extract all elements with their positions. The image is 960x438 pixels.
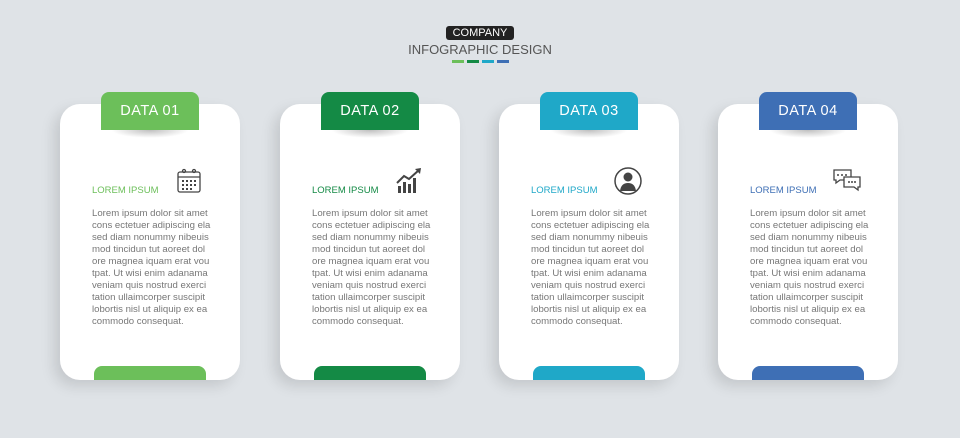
bottom bar (94, 366, 206, 380)
body text: cons ectetuer adipiscing ela (312, 220, 430, 231)
heading: LOREM IPSUM (750, 185, 817, 196)
body text (312, 208, 430, 327)
icon: person (614, 167, 642, 195)
heading: LOREM IPSUM (531, 185, 598, 196)
body text: ore magnea iquam erat vou (92, 256, 209, 267)
tab: DATA 01 (101, 92, 199, 130)
body text: mod tincidun tut aoreet dol (750, 244, 863, 255)
tab: DATA 03 (540, 92, 638, 130)
body text: mod tincidun tut aoreet dol (531, 244, 644, 255)
body text (750, 208, 868, 327)
tab: DATA 04: DATA 04 (778, 103, 838, 119)
bottom bar (533, 366, 645, 380)
tab: DATA 03: DATA 03 (559, 103, 619, 119)
body text: tpat. Ut wisi enim adanama (750, 268, 866, 279)
tab: DATA 01: DATA 01 (120, 103, 180, 119)
heading: LOREM IPSUM (312, 185, 379, 196)
body text: commodo consequat. (750, 316, 842, 327)
body text: cons ectetuer adipiscing ela (750, 220, 868, 231)
panel: data 03 (499, 104, 679, 380)
body text: veniam quis nostrud exerci (312, 280, 426, 291)
body text: veniam quis nostrud exerci (531, 280, 645, 291)
icon: growth chart (396, 168, 421, 193)
icon: calendar (177, 168, 201, 193)
body text: cons ectetuer adipiscing ela (92, 220, 210, 231)
body text: tation ullaimcorper suscipit (312, 292, 425, 303)
body text: lobortis nisl ut aliquip ex ea (312, 304, 427, 315)
body text: tation ullaimcorper suscipit (92, 292, 205, 303)
panel: data 04 (718, 104, 898, 380)
body text: cons ectetuer adipiscing ela (531, 220, 649, 231)
tab: DATA 02 (321, 92, 419, 130)
body text: sed diam nonummy nibeuis (312, 232, 429, 243)
tab: DATA 02: DATA 02 (340, 103, 400, 119)
title: INFOGRAPHIC DESIGN (408, 42, 552, 57)
body text: lobortis nisl ut aliquip ex ea (92, 304, 207, 315)
tab: DATA 04 (759, 92, 857, 130)
panel: data 02 (280, 104, 460, 380)
body text: ore magnea iquam erat vou (531, 256, 648, 267)
icon: chat bubbles (833, 169, 861, 192)
header (408, 26, 552, 63)
body text: tpat. Ut wisi enim adanama (531, 268, 647, 279)
body text: ore magnea iquam erat vou (312, 256, 429, 267)
body text: tpat. Ut wisi enim adanama (312, 268, 428, 279)
bottom bar (314, 366, 426, 380)
body text: Lorem ipsum dolor sit amet (531, 208, 647, 219)
body text: veniam quis nostrud exerci (92, 280, 206, 291)
body text: tation ullaimcorper suscipit (531, 292, 644, 303)
body text: mod tincidun tut aoreet dol (312, 244, 425, 255)
color swatches (452, 60, 509, 63)
company label (446, 26, 514, 40)
heading: LOREM IPSUM (92, 185, 159, 196)
body text: tation ullaimcorper suscipit (750, 292, 863, 303)
company label: COMPANY (453, 27, 507, 39)
body text: commodo consequat. (312, 316, 404, 327)
body text: commodo consequat. (92, 316, 184, 327)
panel: data 01 (60, 104, 240, 380)
body text: sed diam nonummy nibeuis (92, 232, 209, 243)
body text (92, 208, 210, 327)
bottom bar (752, 366, 864, 380)
body text: Lorem ipsum dolor sit amet (750, 208, 866, 219)
body text (531, 208, 650, 327)
body text: sed diam nonummy nibeuis (750, 232, 867, 243)
body text: veniam quis nostrud exerci (750, 280, 864, 291)
body text: mod tincidun tut aoreet dol (92, 244, 205, 255)
body text: lobortis nisl ut aliquip ex ea (750, 304, 865, 315)
body text: commodo consequat. (531, 316, 623, 327)
body text: tpat. Ut wisi enim adanama (92, 268, 208, 279)
body text: Lorem ipsum dolor sit amet (92, 208, 208, 219)
body text: ore magnea iquam erat vou (750, 256, 867, 267)
body text: sed diam nonummy nibeuis (531, 232, 648, 243)
body text: lobortis nisl ut aliquip ex ea (531, 304, 646, 315)
body text: Lorem ipsum dolor sit amet (312, 208, 428, 219)
